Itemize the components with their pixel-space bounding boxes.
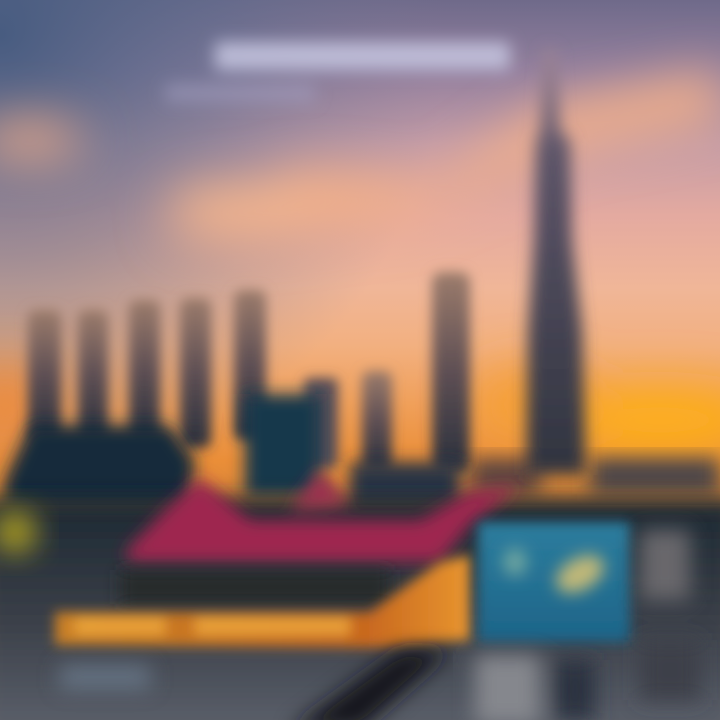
magenta roof [125,470,520,562]
blurred title [165,42,510,102]
lower street details [60,530,700,720]
sunset clouds [0,70,720,240]
blue sign [478,522,630,642]
sign icon [503,547,611,601]
horizon glow [0,365,720,452]
orange banner with blurred text [55,555,470,648]
tall tower [526,50,586,475]
dark band beneath roof [120,570,390,604]
chimney stacks [28,272,470,472]
far skyline strip [470,458,720,494]
dark industrial buildings [5,394,460,510]
ground mass [0,498,720,720]
yellow blob left [0,510,37,554]
